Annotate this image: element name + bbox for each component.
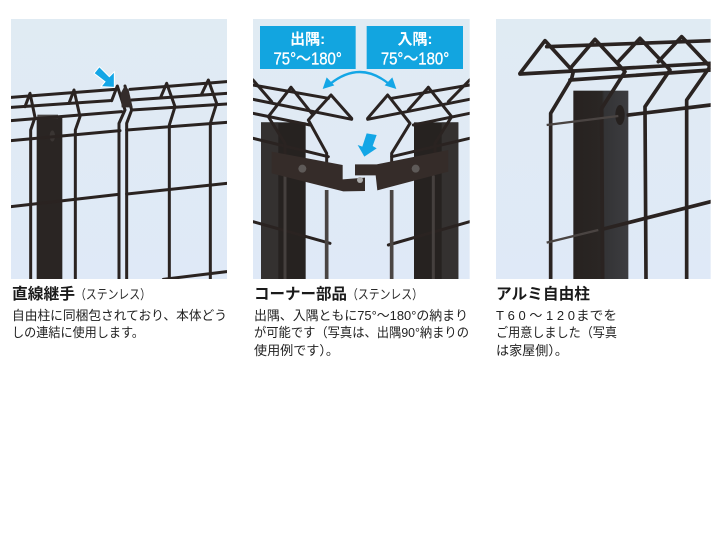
left post xyxy=(261,122,306,279)
left mesh xyxy=(253,80,352,279)
fence mesh xyxy=(520,37,711,279)
panel: aluminium post photo xyxy=(496,19,711,279)
panel: corner part photo xyxy=(253,19,470,279)
aluminium post xyxy=(573,91,628,279)
caption: aluminium post: までを xyxy=(576,308,617,323)
caption: corner part: 使用例です）。 xyxy=(254,343,339,358)
caption: aluminium post xyxy=(496,284,617,358)
fence post xyxy=(37,115,62,280)
caption: corner part: が可能です（写真は、出隅90°納まりの xyxy=(254,325,469,340)
caption: corner part: （ステンレス） xyxy=(347,287,423,302)
caption: straight joint xyxy=(12,284,227,340)
caption: straight joint: しの連結に使用します。 xyxy=(12,325,144,340)
caption: aluminium post: アルミ自由柱 xyxy=(496,284,590,303)
label: outside corner: 出隅: xyxy=(290,31,325,48)
caption: aluminium post: は家屋側）。 xyxy=(496,343,568,358)
label: inside corner xyxy=(367,26,463,69)
label: outside corner: 75°～180° xyxy=(273,48,342,68)
panel: straight joint photo xyxy=(11,19,227,280)
label: inside corner: 入隅: xyxy=(398,31,432,48)
caption: straight joint: （ステンレス） xyxy=(75,287,151,302)
icon: blue arrow to bracket xyxy=(358,133,377,157)
caption: straight joint: 直線継手 xyxy=(12,284,75,303)
corner bracket xyxy=(278,152,442,192)
joint connector xyxy=(121,85,133,107)
caption: corner part xyxy=(254,285,469,358)
caption: aluminium post: T60～120 xyxy=(496,308,575,323)
label: inside corner: 75°～180° xyxy=(381,48,449,68)
caption: aluminium post: ご用意しました（写真 xyxy=(496,325,617,340)
label: outside corner xyxy=(260,26,356,69)
caption: corner part: コーナー部品 xyxy=(254,285,347,303)
right post xyxy=(414,122,458,279)
fence mesh xyxy=(11,80,227,279)
icon: blue arrow to joint xyxy=(94,67,114,87)
icon: curved double arrow xyxy=(323,72,396,89)
caption: straight joint: 自由柱に同梱包されており、本体どう xyxy=(12,308,227,323)
right mesh xyxy=(368,80,470,279)
caption: corner part: 出隅、入隅ともに75°～180°の納まり xyxy=(254,308,468,323)
